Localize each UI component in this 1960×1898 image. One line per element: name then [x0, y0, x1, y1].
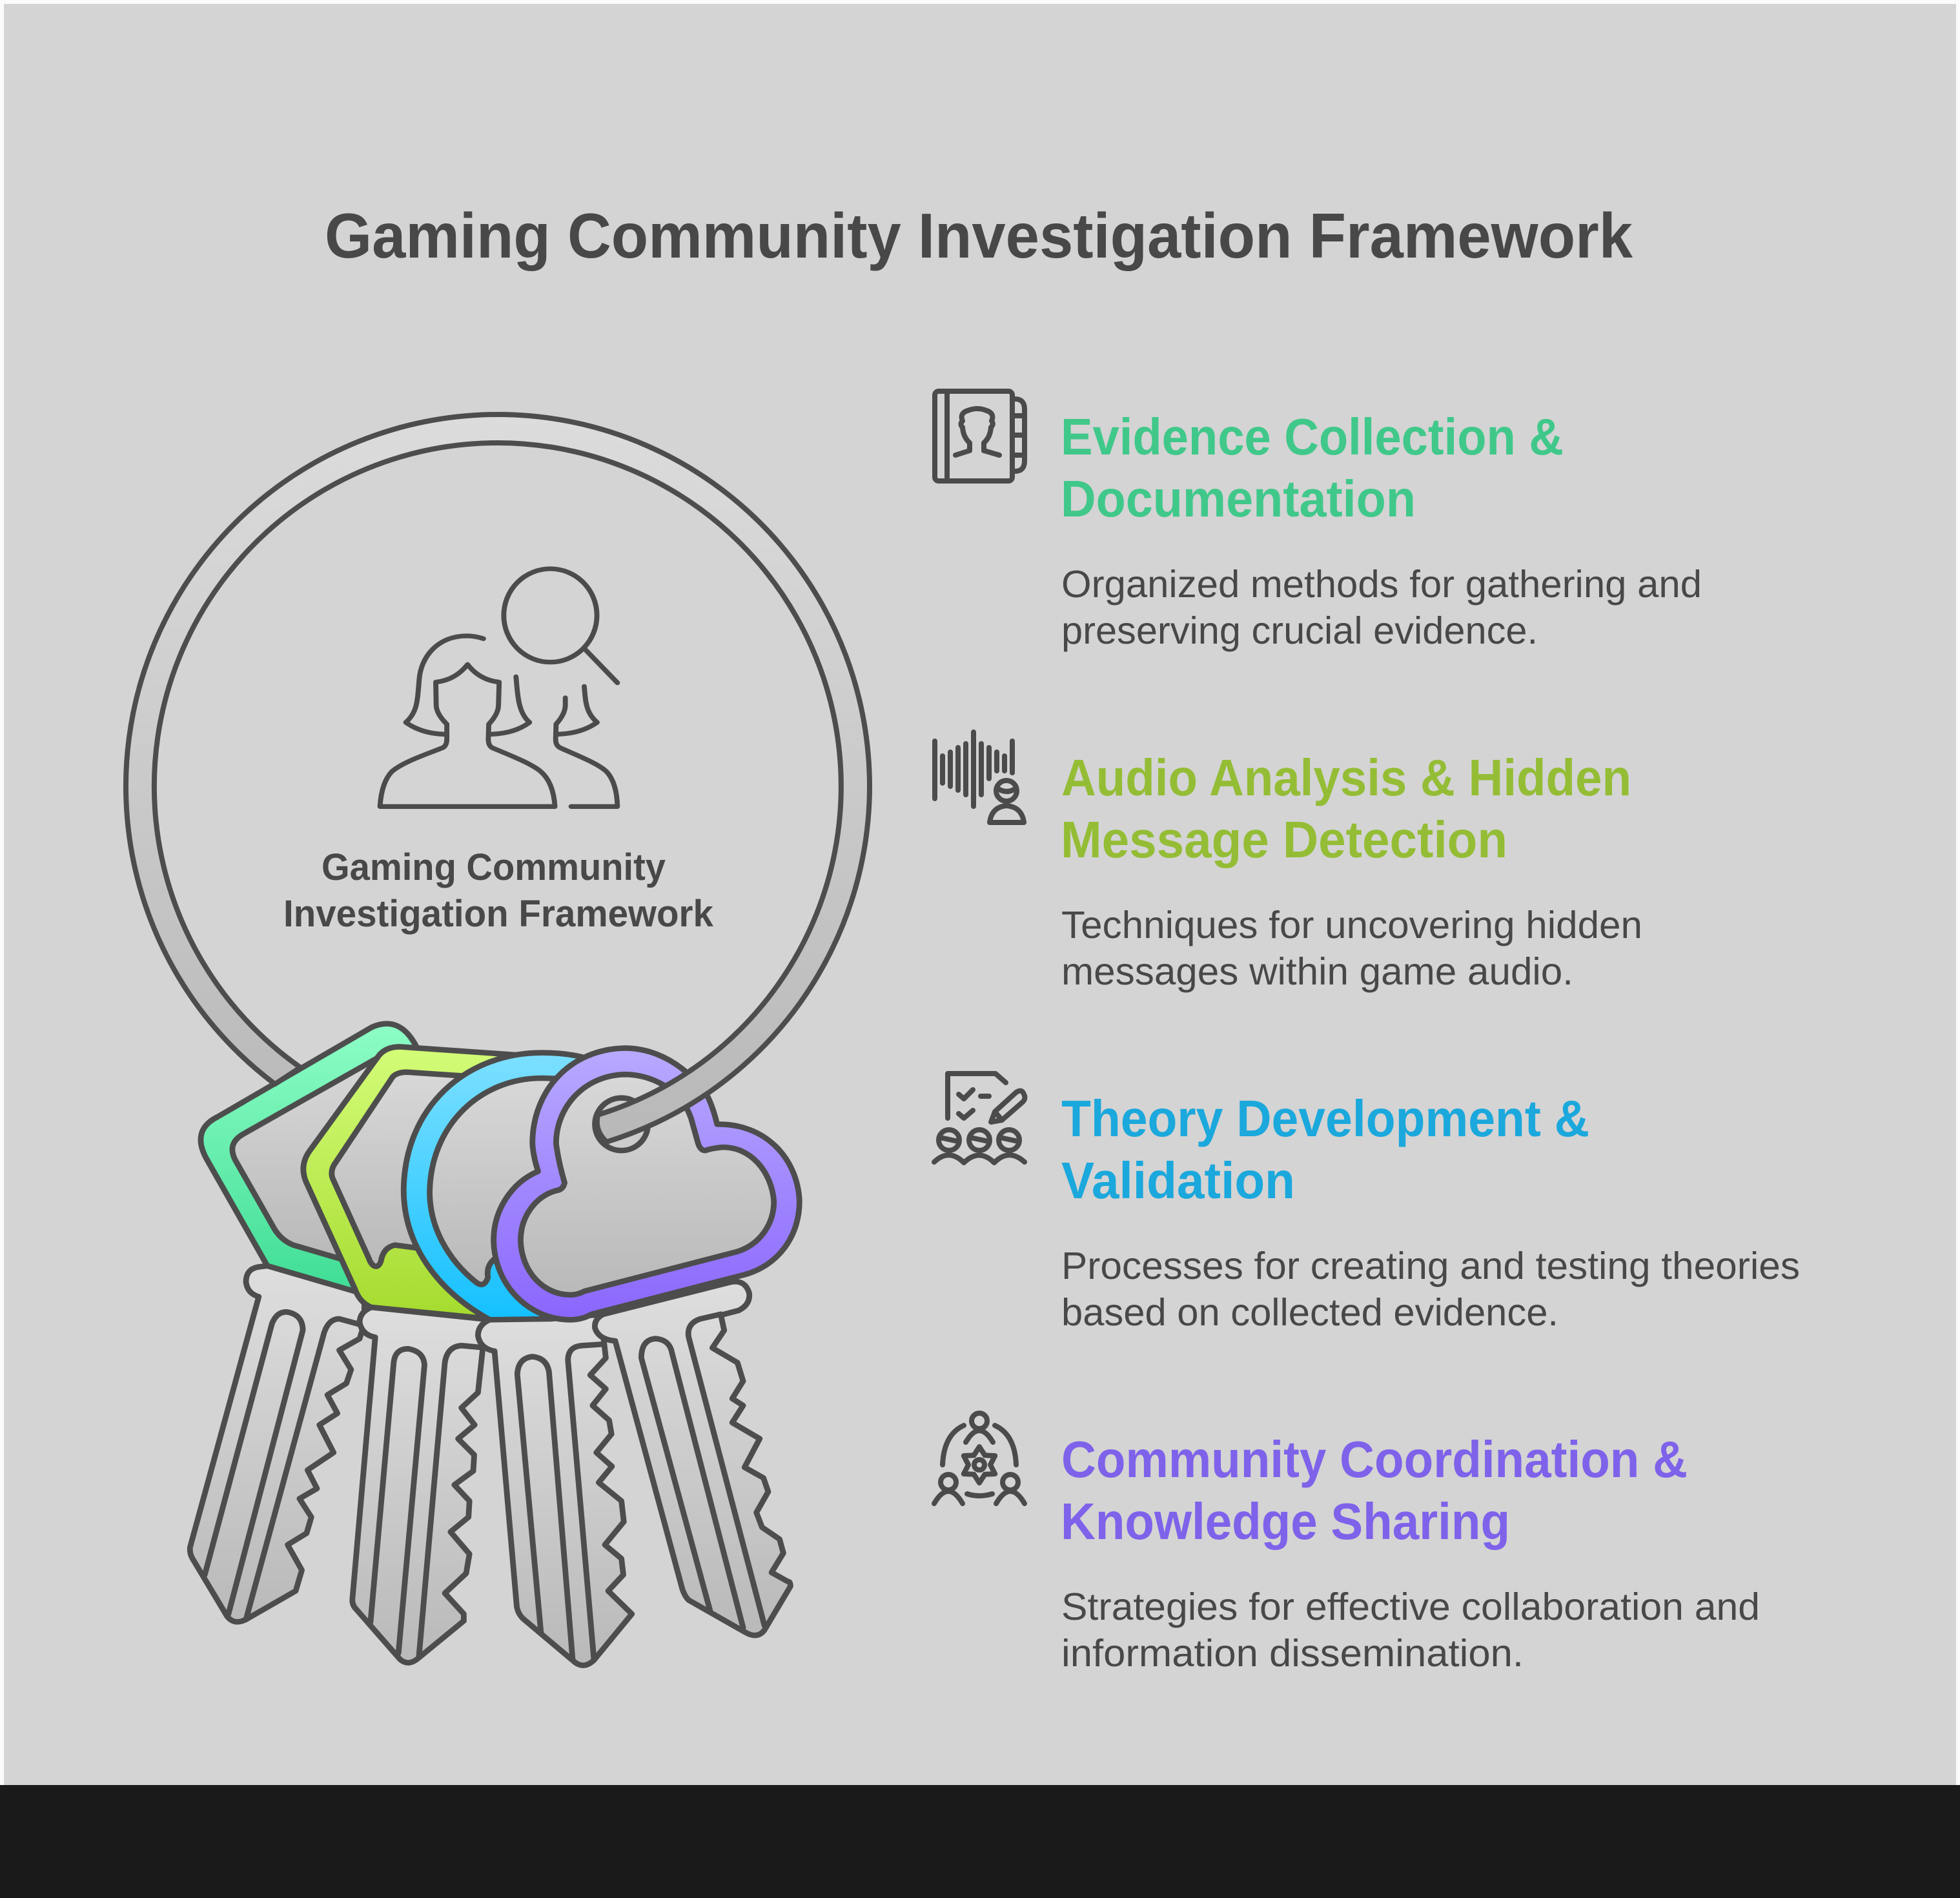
heading: Knowledge Sharing: [1061, 1493, 1510, 1550]
icon: community around a gear: [934, 1413, 1025, 1504]
item 1: evidence collection: [935, 391, 1702, 652]
item 3: theory development: [934, 1074, 1800, 1334]
icon: investigators with magnifier: [380, 569, 617, 806]
key 4: purple cloud: [494, 1048, 799, 1635]
key 3: blue circle: [403, 1053, 632, 1666]
bottom black band: [0, 1785, 1960, 1898]
icon: contact book: [935, 391, 1025, 481]
center label: Gaming Community: [322, 846, 666, 888]
heading: Audio Analysis & Hidden: [1061, 749, 1631, 806]
title: Gaming Community Investigation Framework: [325, 200, 1633, 271]
description: information dissemination.: [1061, 1632, 1524, 1675]
key 2: lime hexagon: [303, 1046, 523, 1663]
heading: Community Coordination &: [1061, 1431, 1688, 1488]
center label: [283, 846, 714, 935]
description: Organized methods for gathering and: [1061, 563, 1702, 606]
keyring illustration: [126, 414, 870, 1666]
item 4: community coordination: [934, 1413, 1760, 1675]
heading: Documentation: [1061, 470, 1416, 527]
heading: Message Detection: [1061, 811, 1507, 868]
item 2: audio analysis: [935, 732, 1642, 993]
description: messages within game audio.: [1061, 950, 1573, 993]
description: preserving crucial evidence.: [1061, 609, 1538, 652]
keys: [190, 1024, 799, 1666]
description: Strategies for effective collaboration and: [1061, 1586, 1760, 1628]
heading: Validation: [1061, 1152, 1295, 1209]
description: Processes for creating and testing theories: [1061, 1245, 1800, 1287]
icon: checklist, pencil and team: [934, 1074, 1025, 1163]
icon: audio waveform with person: [935, 732, 1024, 822]
ring: [126, 414, 870, 1142]
center label: Investigation Framework: [283, 893, 714, 935]
heading: Theory Development &: [1061, 1090, 1589, 1147]
description: based on collected evidence.: [1061, 1291, 1558, 1334]
heading: Evidence Collection &: [1061, 408, 1564, 465]
description: Techniques for uncovering hidden: [1061, 904, 1642, 946]
key 1: green pentagon: [190, 1024, 438, 1622]
